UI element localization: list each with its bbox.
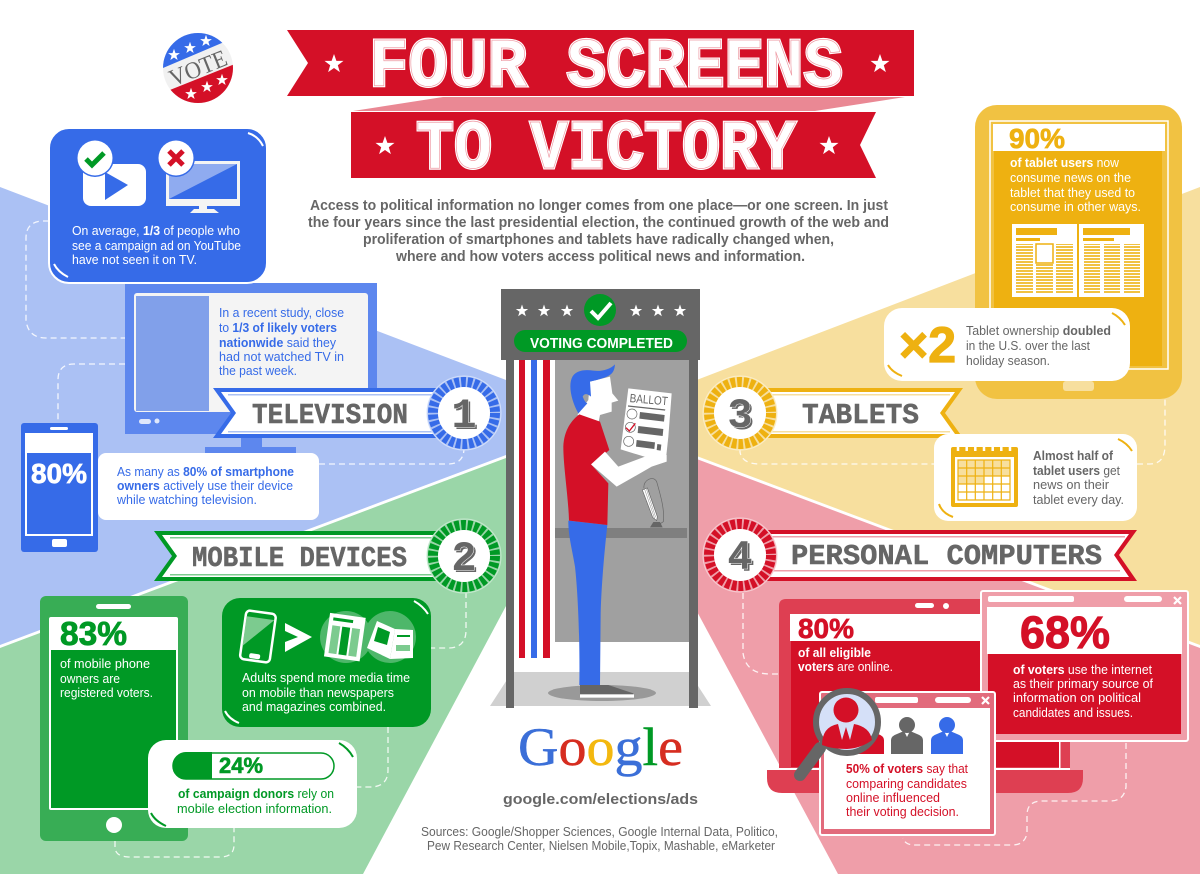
title banner: TO VICTORY <box>416 111 796 190</box>
text: comparing candidates: online influenced <box>846 790 940 805</box>
text: registered voters <box>60 656 153 700</box>
illustration: voting booth <box>490 289 711 708</box>
badge: number 1: 1 <box>453 394 479 442</box>
text: ownership: holiday season. <box>966 353 1050 368</box>
icon: candidates <box>852 717 963 754</box>
text: registered voters: registered voters. <box>60 685 153 700</box>
panel: campaign donors callout: 24% <box>219 753 263 778</box>
text: ownership <box>966 323 1111 368</box>
panel: yellow tablet 90%: 90% <box>1009 123 1065 154</box>
text: daily news: Almost half of <box>1033 448 1114 463</box>
intro text: the four years since the last presidential election, the continued growth of the web and <box>308 215 889 231</box>
text: daily news <box>1033 448 1124 507</box>
intro text: where and how voters access political news and information. <box>395 249 805 265</box>
text: YouTube stat: have not seen it on TV. <box>72 252 197 267</box>
text: recent study <box>219 305 344 378</box>
badge: number 1 <box>427 376 501 450</box>
icon: calendar <box>951 446 1018 507</box>
badge: number 2: 2 <box>453 537 479 585</box>
text: primary source: as their primary source of <box>1013 676 1153 691</box>
text: primary source: of voters use the internet <box>1013 662 1152 677</box>
panel: YouTube callout <box>49 128 267 283</box>
text: media time: Adults spend more media time <box>242 670 410 685</box>
heading ribbon: tablets <box>760 388 963 438</box>
text: recent study: had not watched TV in <box>219 349 344 364</box>
badge: number 2: 2 <box>451 535 477 583</box>
badge: number 4: 4 <box>727 534 753 582</box>
text: ownership: in the U.S. over the last <box>966 338 1090 353</box>
text: sources <box>421 825 778 853</box>
background: computers sector <box>694 458 1200 874</box>
text: comparing candidates: 50% of voters say that <box>846 761 968 776</box>
panel: tablet ownership callout: ×2 <box>899 317 956 373</box>
background: television sector <box>0 187 506 645</box>
text: recent study: the past week. <box>219 363 297 378</box>
text: media time: on mobile than newspapers <box>242 685 394 700</box>
icon: vote badge: VOTE <box>166 46 231 92</box>
intro text: Access to political information no longer comes from one place—or one screen. In just <box>310 198 888 214</box>
text: comparing candidates: their voting decision. <box>846 804 959 819</box>
icon: phone greater than print <box>240 610 416 663</box>
text: media time: and magazines combined. <box>242 699 386 714</box>
intro text <box>308 198 889 265</box>
icon: magnifier <box>800 691 878 775</box>
text: smartphone stat: while watching television. <box>116 492 257 507</box>
text: primary source: candidates and issues. <box>1013 705 1133 720</box>
text: url: google.com/elections/ads <box>503 791 698 808</box>
heading ribbon: television <box>213 388 440 438</box>
text: daily news: tablet every day. <box>1033 492 1124 507</box>
text: YouTube stat: see a campaign ad on YouTube <box>72 238 241 253</box>
text: campaign donors: of campaign donors rely on <box>178 786 334 801</box>
text: ownership: Tablet ownership doubled <box>966 323 1111 338</box>
panel: window 68%: 68% <box>1020 607 1110 658</box>
heading ribbon: personal computers: PERSONAL COMPUTERS <box>791 540 1102 573</box>
badge: number 2 <box>427 519 501 593</box>
text: recent study: to 1/3 of likely voters <box>219 320 337 335</box>
text: YouTube stat: On average, 1/3 of people who <box>72 223 240 238</box>
panel: media time callout <box>222 598 431 727</box>
ballot sheet <box>621 388 672 462</box>
text: registered voters: of mobile phone <box>60 656 150 671</box>
text: tablet news: tablet that they used to <box>1010 185 1135 200</box>
badge: number 4: 4 <box>729 536 755 584</box>
text: tablet news: consume news on the <box>1010 170 1131 185</box>
heading ribbon: mobile devices: MOBILE DEVICES <box>192 542 407 575</box>
title banner: FOUR SCREENS <box>369 29 843 108</box>
text: registered voters: owners are <box>60 671 120 686</box>
text: tablet news: of tablet users now <box>1010 155 1120 170</box>
badge: number 3: 3 <box>727 392 753 440</box>
ballot sheet: BALLOT <box>629 391 669 408</box>
text: tablet news <box>1010 155 1141 214</box>
panel: campaign donors callout <box>148 740 357 828</box>
badge: number 4 <box>703 518 777 592</box>
title banner <box>287 29 914 190</box>
text: comparing candidates: comparing candidates <box>846 776 967 791</box>
icon: YouTube with check <box>76 139 146 206</box>
panel: window 50% <box>800 691 995 835</box>
text: comparing candidates <box>846 761 968 819</box>
text: smartphone stat: As many as 80% of smartphone <box>117 464 294 479</box>
badge: number 1: 1 <box>451 392 477 440</box>
text: recent study: In a recent study, close <box>219 305 344 320</box>
text: voters online: of all eligible <box>798 645 871 660</box>
text: tablet news: consume in other ways. <box>1010 199 1141 214</box>
text: YouTube stat <box>72 223 241 267</box>
heading ribbon: tablets: TABLETS <box>802 399 919 432</box>
badge: number 3 <box>703 376 777 450</box>
intro text: proliferation of smartphones and tablets have radically changed when, <box>363 232 834 248</box>
logo: Google: Google <box>518 717 683 777</box>
panel: yellow tablet 90% <box>975 105 1182 399</box>
text: voters online <box>798 645 893 674</box>
panel: laptop 80% <box>767 599 1083 793</box>
panel: television monitor <box>125 283 377 454</box>
illustration: voter holding ballot <box>563 364 672 698</box>
booth sign: VOTING COMPLETED <box>530 336 673 352</box>
pen on chain <box>642 479 664 527</box>
text: voters online: voters are online. <box>798 659 893 674</box>
title banner: FOUR SCREENS <box>369 29 843 108</box>
title banner: TO VICTORY <box>416 111 796 190</box>
text: primary source <box>1013 662 1153 720</box>
background: mobile sector <box>0 458 506 874</box>
panel: smartphone stat: 80% <box>31 458 87 489</box>
panel: laptop 80%: 80% <box>798 613 854 644</box>
heading ribbon: television: TELEVISION <box>252 399 408 432</box>
text: media time <box>242 670 410 714</box>
panel: window 68% <box>981 591 1188 741</box>
panel: smartphone stat <box>21 423 319 552</box>
icon: open newspaper <box>1012 224 1144 297</box>
background: tablets sector <box>694 187 1200 645</box>
text: primary source: information on political <box>1013 690 1141 705</box>
text: campaign donors: mobile election information. <box>177 801 332 816</box>
panel: green phone 83%: 83% <box>60 615 127 652</box>
badge: number 3: 3 <box>729 394 755 442</box>
text: smartphone stat: owners actively use their device <box>117 478 293 493</box>
text: smartphone stat <box>116 464 294 507</box>
text: daily news: tablet users get <box>1033 463 1120 478</box>
text: sources: Sources: Google/Shopper Sciences, Google Internal Data, Politico, <box>421 825 778 839</box>
panel: tablet ownership callout <box>884 308 1130 381</box>
text: daily news: news on their <box>1033 477 1110 492</box>
panel: daily tablet news callout <box>934 434 1137 521</box>
heading ribbon: personal computers <box>760 530 1137 581</box>
booth sign <box>501 289 700 360</box>
text: campaign donors <box>177 786 334 816</box>
heading ribbon: mobile devices <box>154 531 440 581</box>
icon: TV with cross <box>157 139 240 213</box>
panel: green phone 83% <box>40 596 188 841</box>
icon: vote badge <box>163 33 233 103</box>
text: recent study: nationwide said they <box>219 335 336 350</box>
text: sources: Pew Research Center, Nielsen Mobile,Topix, Mashable, eMarketer <box>427 839 775 853</box>
